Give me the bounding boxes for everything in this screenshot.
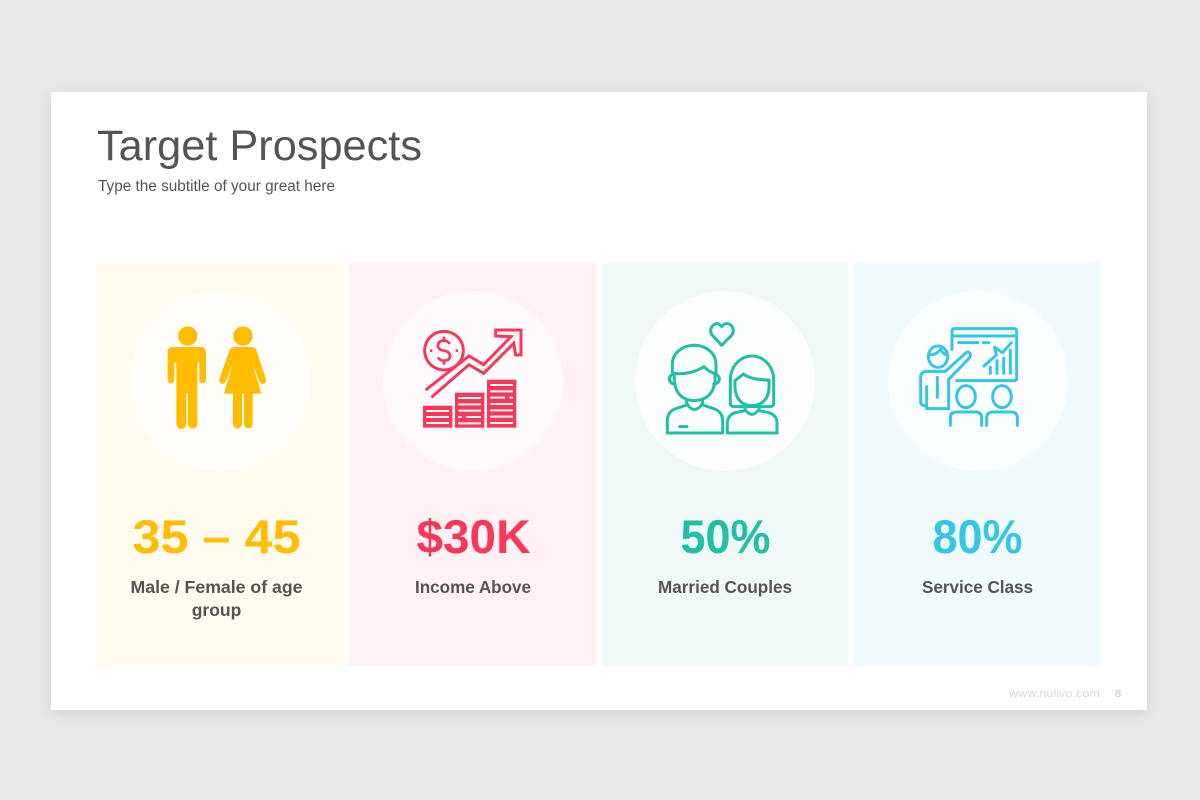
value: income: $30K	[416, 510, 531, 563]
icon circle: income	[383, 291, 563, 471]
icon circle: couples	[635, 291, 815, 471]
white slide card	[51, 92, 1147, 710]
value: married couples: 50%	[680, 510, 770, 563]
panel: income	[350, 263, 596, 666]
label: age: group	[192, 600, 241, 620]
label: age: Male / Female of age	[130, 577, 303, 597]
icon: coin, rising arrow and coin stacks	[423, 330, 521, 428]
panel: age	[98, 263, 344, 666]
value: service class: 80%	[932, 510, 1022, 563]
label: income: Income Above	[415, 577, 531, 597]
page number: 8	[1115, 688, 1121, 700]
panel: married couples	[602, 263, 848, 666]
label: service class: Service Class	[922, 577, 1033, 597]
icon: man and woman	[168, 326, 266, 429]
label: married couples: Married Couples	[658, 577, 792, 597]
footer url: www.nulivo.com	[1008, 688, 1100, 700]
icon circle: age	[130, 291, 310, 471]
icon circle: service class	[888, 291, 1068, 471]
icon: couple with heart	[667, 323, 777, 433]
panel: service class	[854, 263, 1100, 666]
subtitle: Type the subtitle of your great here	[98, 178, 335, 195]
title: Target Prospects	[97, 122, 422, 170]
icon: presenter with chart and audience	[921, 329, 1017, 425]
value: age range: 35 – 45	[132, 510, 300, 563]
